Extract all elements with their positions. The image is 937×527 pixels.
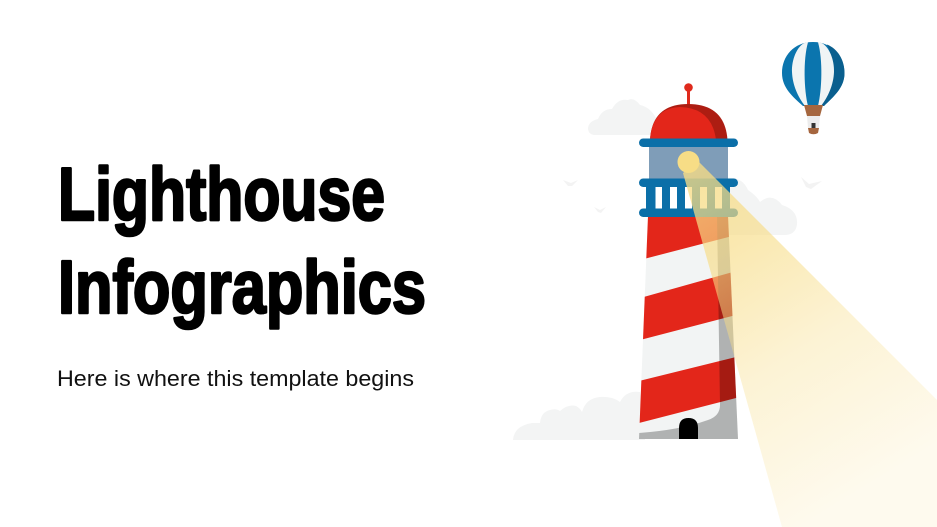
balcony bands [639, 138, 738, 217]
balloon cage [807, 116, 820, 129]
balloon skirt [804, 105, 823, 116]
dome [650, 104, 728, 140]
door [679, 418, 698, 439]
hot air balloon [782, 42, 844, 134]
tower shadow [639, 217, 738, 439]
lamp [678, 151, 700, 173]
cloud: upper left of tower [588, 99, 656, 135]
balloon envelope [782, 42, 844, 106]
balloon basket [808, 128, 819, 134]
cloud: bottom left [513, 392, 645, 440]
subtitle: Here is where this template begins [57, 366, 414, 391]
tower body [639, 217, 738, 439]
railing [646, 186, 730, 209]
lantern room [649, 146, 728, 180]
cloud: right behind tower [725, 178, 797, 235]
birds [563, 177, 822, 213]
title: Infographics [58, 245, 426, 329]
light beam [683, 161, 937, 527]
lighthouse [630, 83, 937, 527]
title: Lighthouse [58, 152, 385, 236]
title [58, 152, 426, 329]
antenna [684, 83, 693, 106]
red stripes [635, 214, 740, 424]
